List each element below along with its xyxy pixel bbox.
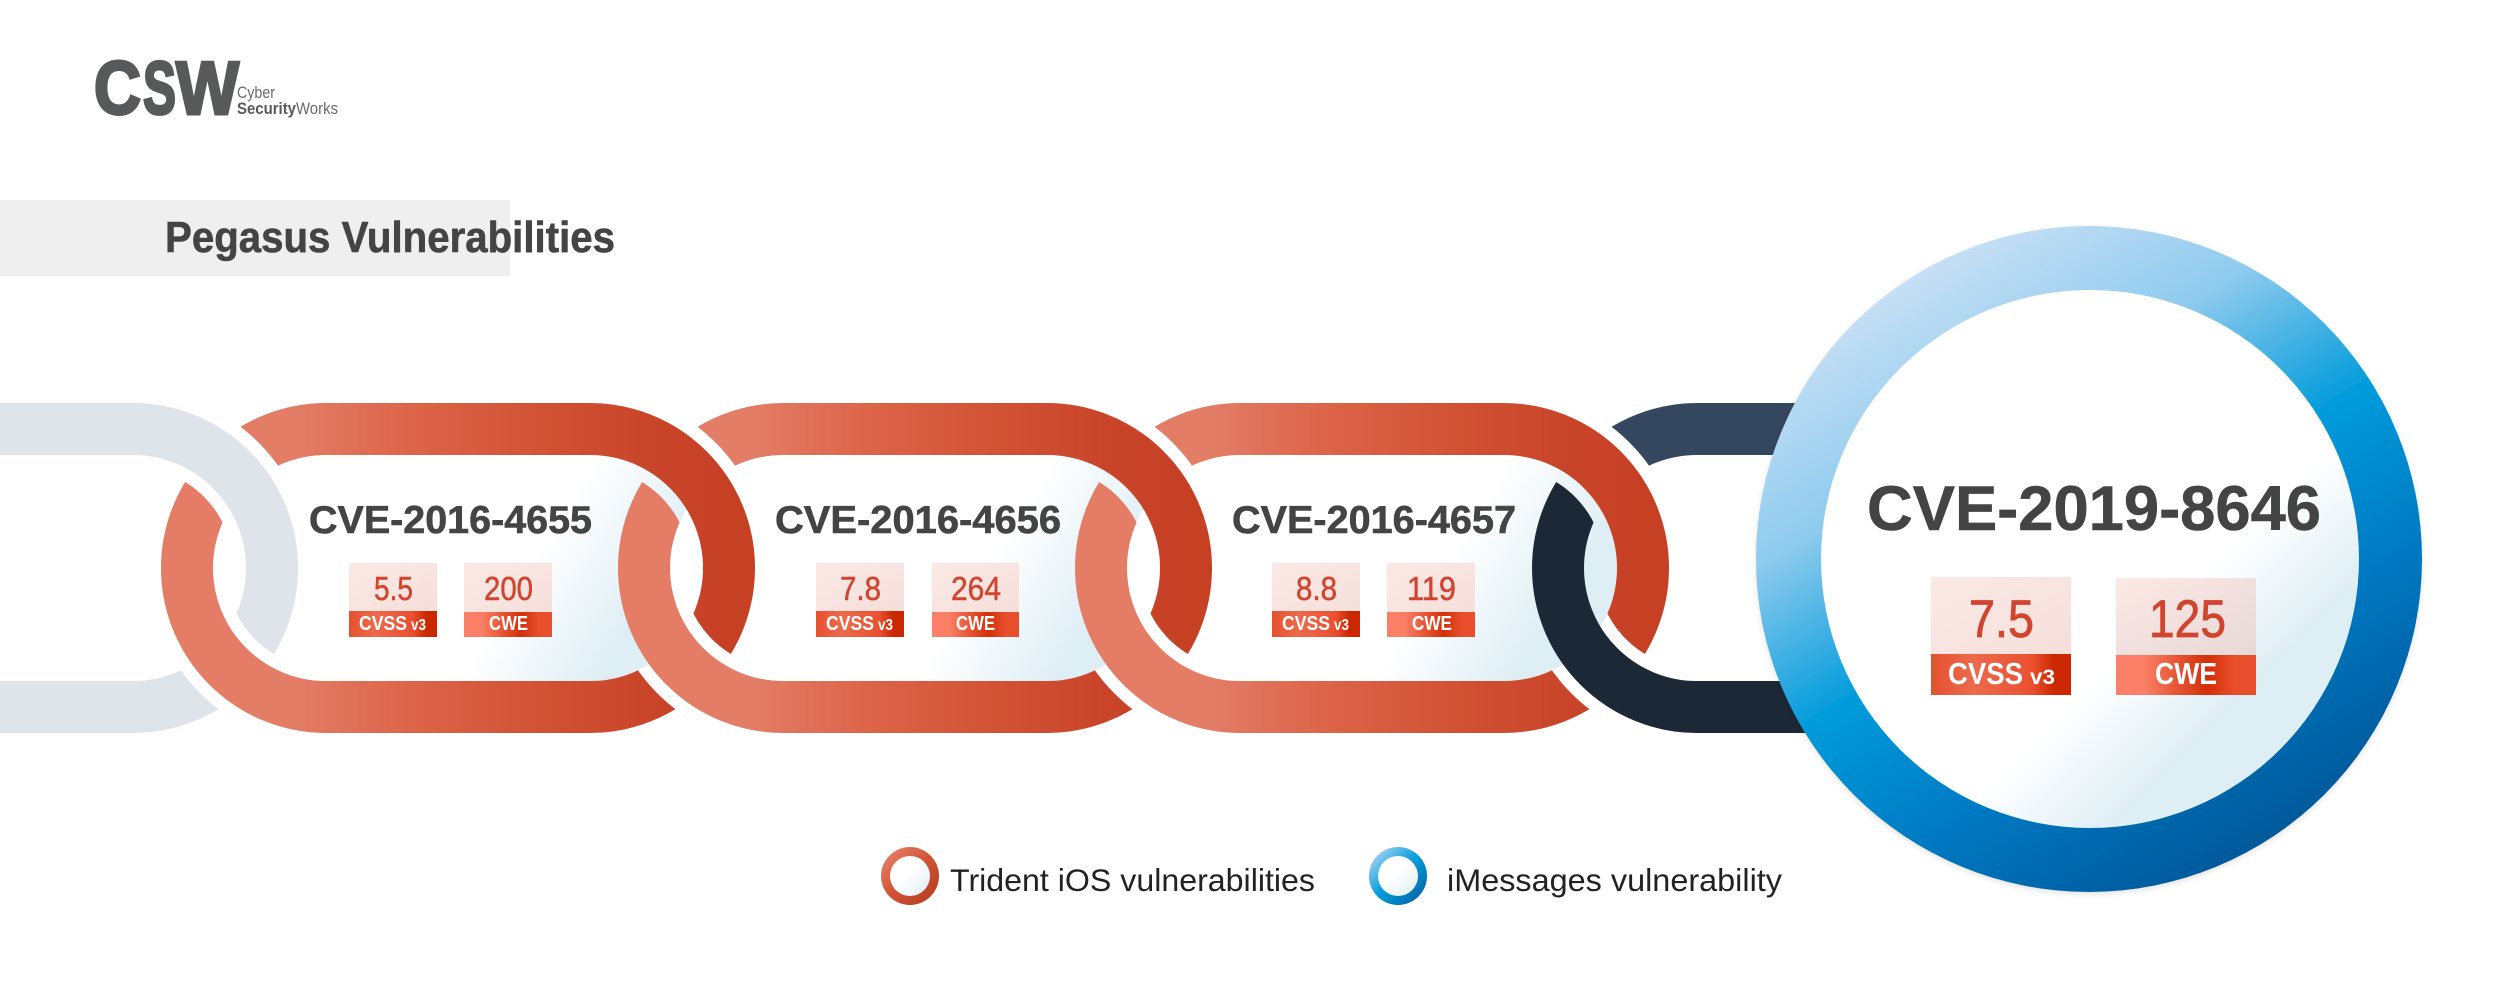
panel: CVE-2016-4657: 8.8	[1296, 570, 1337, 607]
heading: Pegasus Vulnerabilities	[0, 200, 615, 276]
chain link: dark link into CVE-2019-8646	[1532, 403, 1806, 733]
panel: CVE-2016-4655: CVE-2016-4655	[309, 499, 592, 542]
heading: Pegasus Vulnerabilities: Pegasus Vulnerabilities	[165, 213, 615, 262]
chain link: CVE-2016-4656	[644, 429, 1186, 707]
panel: CVE-2019-8646 large ring: v3	[2030, 666, 2055, 689]
legend: iMessages vulnerability: iMessages vulnerability	[1447, 862, 1782, 898]
chain link: faded earlier link	[0, 429, 272, 707]
panel: CVE-2016-4656	[775, 499, 1061, 637]
panel: CVE-2019-8646 large ring: CWE	[2155, 656, 2217, 691]
legend: Trident iOS vulnerabilities: Trident iOS vulnerabilities	[950, 862, 1315, 898]
link interiors	[213, 455, 1617, 681]
panel: CVE-2016-4656: CVE-2016-4656	[775, 499, 1061, 542]
logo: Cyber Security Works: Security	[237, 100, 297, 118]
panel: CVE-2016-4657: 119	[1407, 570, 1456, 607]
logo: Cyber Security Works: S	[143, 46, 176, 130]
logo: Cyber Security Works: W	[176, 46, 239, 130]
logo: Cyber Security Works: Works	[296, 100, 338, 118]
panel: CVE-2019-8646 large ring: CVE-2019-8646	[1867, 474, 2321, 544]
chain link: CVE-2016-4655	[187, 429, 729, 707]
panel: CVE-2016-4657	[1232, 499, 1516, 637]
panel: CVE-2016-4656: 264	[951, 570, 1001, 607]
panel: CVE-2016-4657: CVE-2016-4657	[1232, 499, 1516, 542]
panel: CVE-2019-8646 large ring	[1756, 226, 2422, 892]
panel: CVE-2016-4655: v3	[411, 617, 426, 634]
chain link: CVE-2016-4657	[1101, 429, 1643, 707]
panel: CVE-2016-4657: v3	[1334, 617, 1349, 634]
panel: CVE-2016-4657: CWE	[1412, 613, 1452, 635]
panel: CVE-2019-8646 large ring: 7.5	[1969, 590, 2034, 649]
logo: Cyber Security Works	[94, 46, 338, 130]
panel: CVE-2019-8646 large ring: CVSS	[1948, 656, 2023, 691]
panel: CVE-2016-4655: 5.5	[374, 570, 413, 607]
logo: Cyber Security Works: Cyber	[237, 84, 275, 102]
panel: CVE-2016-4655: CVSS	[359, 613, 407, 635]
logo: Cyber Security Works: C	[94, 46, 141, 130]
panel: CVE-2019-8646 large ring: 125	[2149, 590, 2226, 649]
legend: Trident iOS vulnerabilities	[881, 847, 1315, 905]
panel: CVE-2016-4656: CVSS	[826, 613, 874, 635]
panel: CVE-2016-4656: CWE	[956, 613, 995, 635]
panel: CVE-2016-4656: 7.8	[840, 570, 881, 607]
panel: CVE-2016-4656: v3	[878, 617, 893, 634]
panel: CVE-2016-4655: CWE	[489, 613, 528, 635]
legend: iMessages vulnerability	[1369, 847, 1782, 905]
panel: CVE-2016-4655	[309, 499, 592, 637]
panel: CVE-2016-4655: 200	[484, 570, 533, 607]
panel: CVE-2016-4657: CVSS	[1282, 613, 1330, 635]
